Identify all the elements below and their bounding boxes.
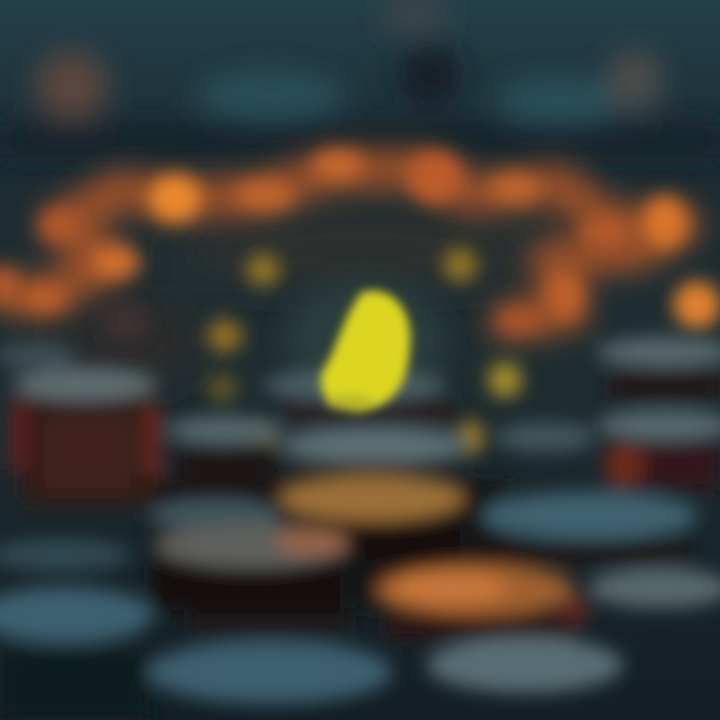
centre stack bbox=[263, 369, 447, 401]
dim brown haze beneath the band bbox=[60, 220, 550, 380]
background bokeh shapes bbox=[0, 0, 720, 155]
centre-left stack bbox=[178, 445, 278, 495]
central dome glow bbox=[285, 280, 445, 400]
dark shadow mass under the stacks bbox=[150, 480, 510, 610]
central yellow flame/coin bbox=[321, 291, 411, 412]
bottom left coins bbox=[0, 539, 130, 571]
small yellow sparks bbox=[101, 248, 522, 456]
left upper stack bbox=[22, 395, 157, 505]
orange glowing band bbox=[0, 170, 680, 322]
coin stacks bbox=[0, 337, 720, 720]
lower centre glowing coin bbox=[385, 612, 575, 640]
bright orange hot spots bbox=[0, 150, 720, 330]
right stacks bbox=[597, 337, 720, 367]
bottom centre coins bbox=[148, 640, 392, 704]
